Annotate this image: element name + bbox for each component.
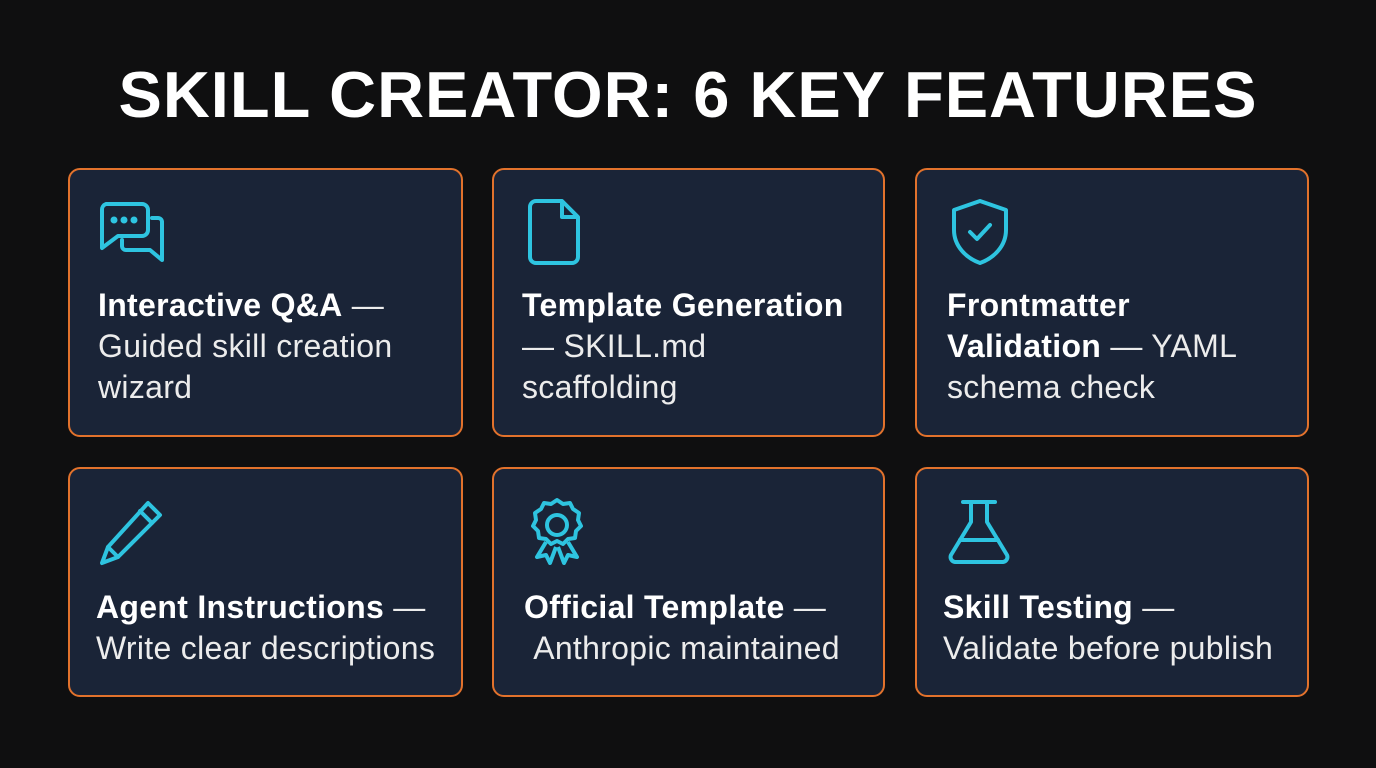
- text: [522, 287, 844, 405]
- text: Anthropic maintained: [533, 630, 840, 666]
- text: wizard: [98, 369, 192, 405]
- panel: frontmatter validation: [915, 168, 1309, 437]
- text: — SKILL.md: [522, 328, 706, 364]
- text: Agent Instructions —: [96, 589, 426, 625]
- text: Frontmatter: [947, 287, 1130, 323]
- icon: flask: [948, 500, 1010, 564]
- text: scaffolding: [522, 369, 678, 405]
- icon: document: [528, 199, 580, 265]
- text: Guided skill creation: [98, 328, 392, 364]
- icon: shield check: [952, 199, 1008, 265]
- text: Official Template —: [524, 589, 826, 625]
- text: Template Generation: [522, 287, 844, 323]
- text: [947, 287, 1237, 405]
- text: Skill Testing —: [943, 589, 1175, 625]
- icon: pencil: [100, 500, 162, 566]
- panel: template generation: [492, 168, 885, 437]
- panel: interactive Q&A: [68, 168, 463, 437]
- text: [943, 589, 1273, 666]
- icon: award ribbon: [531, 498, 583, 565]
- panel: skill testing: [915, 467, 1309, 697]
- text: [98, 287, 392, 405]
- text: [524, 589, 840, 666]
- text: Validation — YAML: [947, 328, 1237, 364]
- text: Write clear descriptions: [96, 630, 435, 666]
- text: [96, 589, 435, 666]
- panel: official template: [492, 467, 885, 697]
- text: Interactive Q&A —: [98, 287, 384, 323]
- text: Validate before publish: [943, 630, 1273, 666]
- icon: chat bubbles: [100, 202, 164, 262]
- panel: agent instructions: [68, 467, 463, 697]
- text: schema check: [947, 369, 1155, 405]
- title: SKILL CREATOR: 6 KEY FEATURES: [119, 58, 1257, 131]
